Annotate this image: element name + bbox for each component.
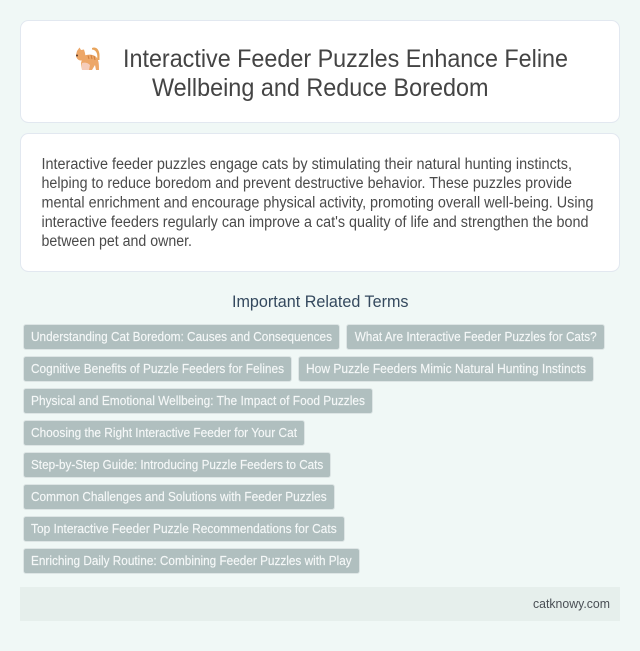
tag: top recommendations: Top Interactive Feeder Puzzle Recommendations for Cats	[31, 521, 337, 536]
tag: what are feeder puzzles	[346, 324, 604, 350]
icon: orange cat	[76, 48, 100, 70]
tag: mimic hunting instincts	[298, 356, 594, 382]
footer	[20, 587, 620, 621]
title	[123, 45, 568, 102]
tag: step-by-step guide: Step-by-Step Guide: Introducing Puzzle Feeders to Cats	[31, 457, 323, 472]
panel: related term tags	[24, 324, 604, 574]
tag: enriching daily routine	[24, 548, 360, 574]
tag: enriching daily routine: Enriching Daily Routine: Combining Feeder Puzzles with Play	[31, 553, 352, 568]
tag: common challenges	[24, 484, 334, 510]
text block: intro paragraph: between pet and owner.	[42, 233, 192, 250]
tag: common challenges: Common Challenges and Solutions with Feeder Puzzles	[31, 489, 327, 504]
tag: understanding cat boredom: Understanding Cat Boredom: Causes and Consequences	[31, 329, 332, 344]
footer: source site: catknowy.com	[533, 596, 610, 611]
panel: intro paragraph card	[20, 134, 620, 272]
title: Interactive Feeder Puzzles Enhance Feline	[123, 45, 568, 73]
text block: intro paragraph	[42, 156, 594, 250]
tag: step-by-step guide	[24, 452, 330, 478]
tag: cognitive benefits: Cognitive Benefits of Puzzle Feeders for Felines	[31, 361, 284, 376]
text block: intro paragraph: interactive feeders regularly can improve a cat's quality of life and strengthen the bond	[42, 214, 588, 231]
tag: what are feeder puzzles: What Are Interactive Feeder Puzzles for Cats?	[355, 329, 597, 344]
tag: choosing the right feeder	[24, 420, 304, 446]
tag: mimic hunting instincts: How Puzzle Feeders Mimic Natural Hunting Instincts	[306, 361, 586, 376]
tag: top recommendations	[24, 516, 344, 542]
title: Wellbeing and Reduce Boredom	[152, 74, 488, 102]
tag: understanding cat boredom	[24, 324, 340, 350]
text block: intro paragraph: Interactive feeder puzzles engage cats by stimulating their natural hunting instincts,	[42, 156, 572, 173]
tag: physical and emotional wellbeing: Physical and Emotional Wellbeing: The Impact of Food Puzzles	[31, 393, 365, 408]
tag: cognitive benefits	[24, 356, 292, 382]
tag: physical and emotional wellbeing	[24, 388, 372, 414]
text block: intro paragraph: helping to reduce boredom and prevent destructive behavior. These puzzles provide	[42, 175, 572, 192]
text block: intro paragraph: mental enrichment and encourage physical activity, promoting overall well-being. Using	[42, 194, 594, 212]
heading: important related terms: Important Related Terms	[232, 293, 408, 311]
tag: choosing the right feeder: Choosing the Right Interactive Feeder for Your Cat	[31, 425, 297, 440]
panel: title card	[20, 20, 620, 122]
